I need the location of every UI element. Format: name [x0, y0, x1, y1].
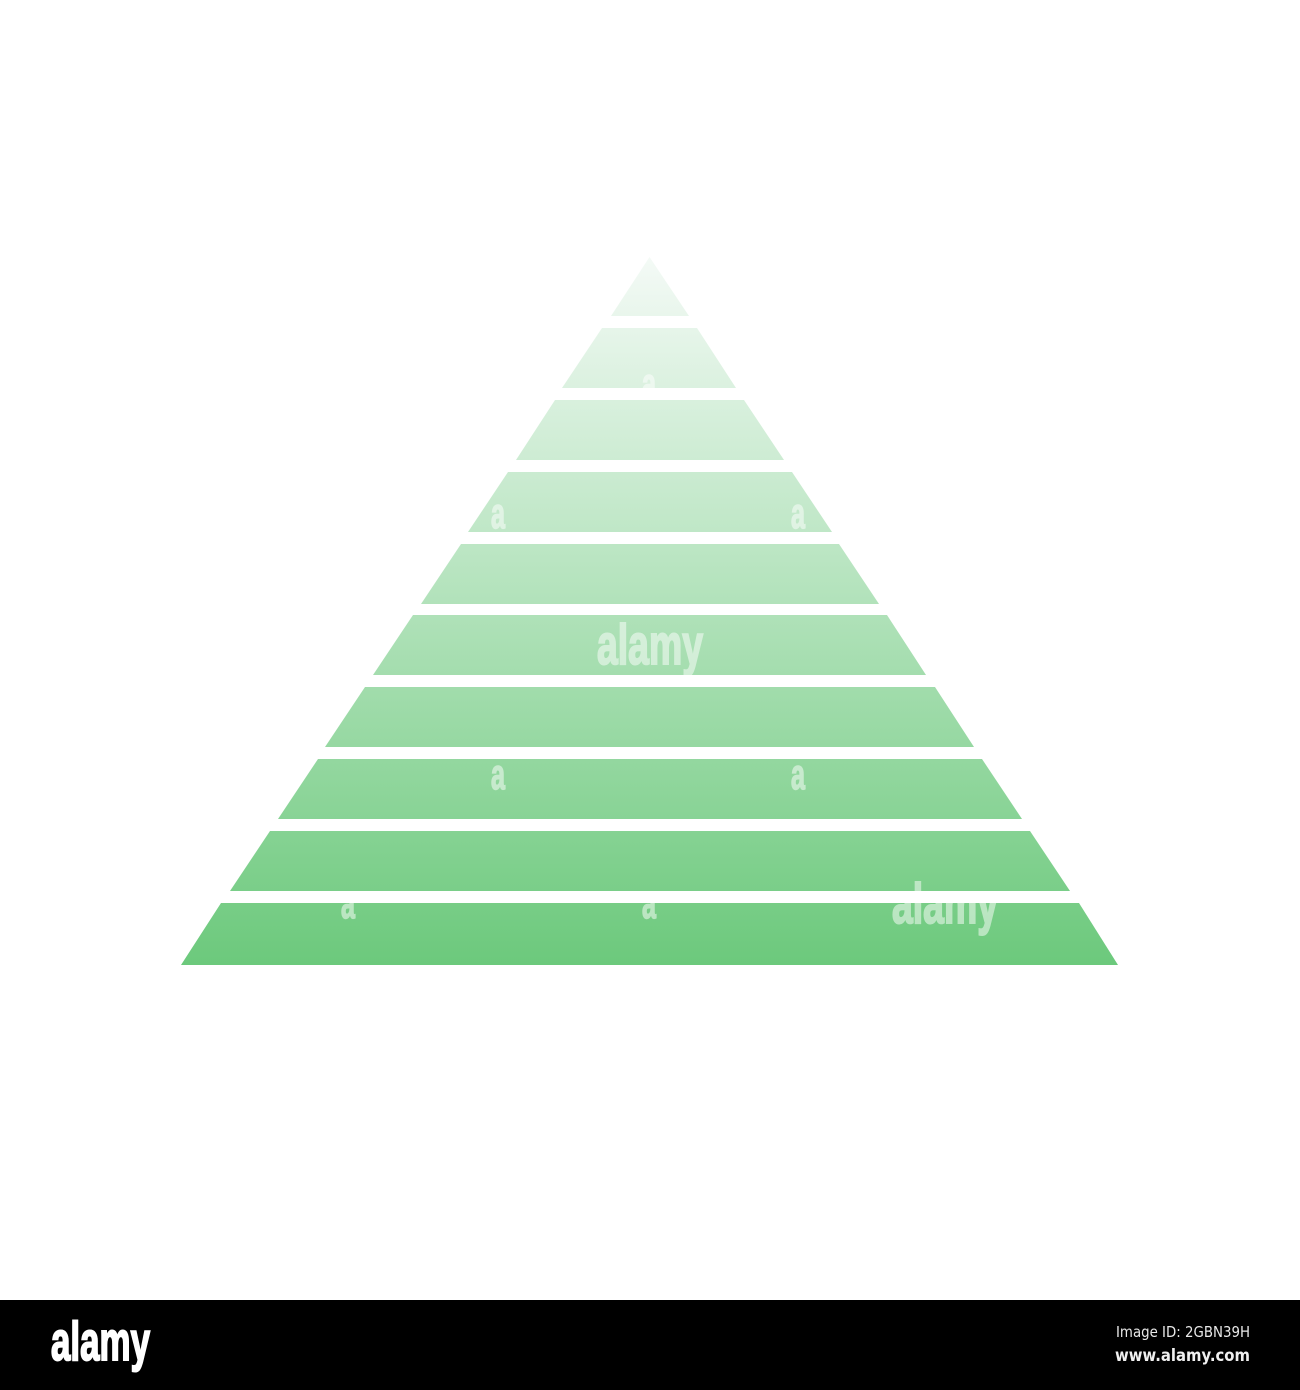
pyramid tier 10 (base): [181, 903, 1118, 965]
footer logo: alamy: [51, 1310, 150, 1372]
pyramid tier 4: [468, 472, 832, 532]
watermark: small letter, tier 4 left: a: [491, 490, 506, 538]
pyramid tier 7: [325, 687, 974, 747]
watermark: small letter, base centre: a: [642, 880, 657, 928]
footer url: www.alamy.com: [1115, 1346, 1250, 1366]
pyramid tier 2: [562, 328, 736, 388]
pyramid tier 6: [373, 615, 926, 675]
pyramid tier 1 (apex): [611, 257, 689, 316]
footer image id: Image ID: 2GBN39H: [1116, 1323, 1250, 1341]
footer bar: [0, 1300, 1300, 1390]
pyramid tier 5: [421, 544, 879, 604]
watermark: small letter, top tier: a: [642, 360, 657, 408]
watermark: small letter, tier 8 left: a: [491, 751, 506, 799]
pyramid tier 9: [230, 831, 1070, 891]
watermark: small letter, tier 8 right: a: [791, 751, 806, 799]
pyramid tier 3: [516, 400, 784, 460]
watermark: small letter, tier 4 right: a: [791, 490, 806, 538]
pyramid tier 8: [278, 759, 1022, 819]
watermark: lower right logo: alamy: [892, 872, 998, 936]
watermark: small letter, base left: a: [341, 880, 356, 928]
watermarks: [341, 360, 998, 936]
pyramid chart: [181, 257, 1118, 965]
watermark: centre logo: alamy: [597, 613, 703, 677]
